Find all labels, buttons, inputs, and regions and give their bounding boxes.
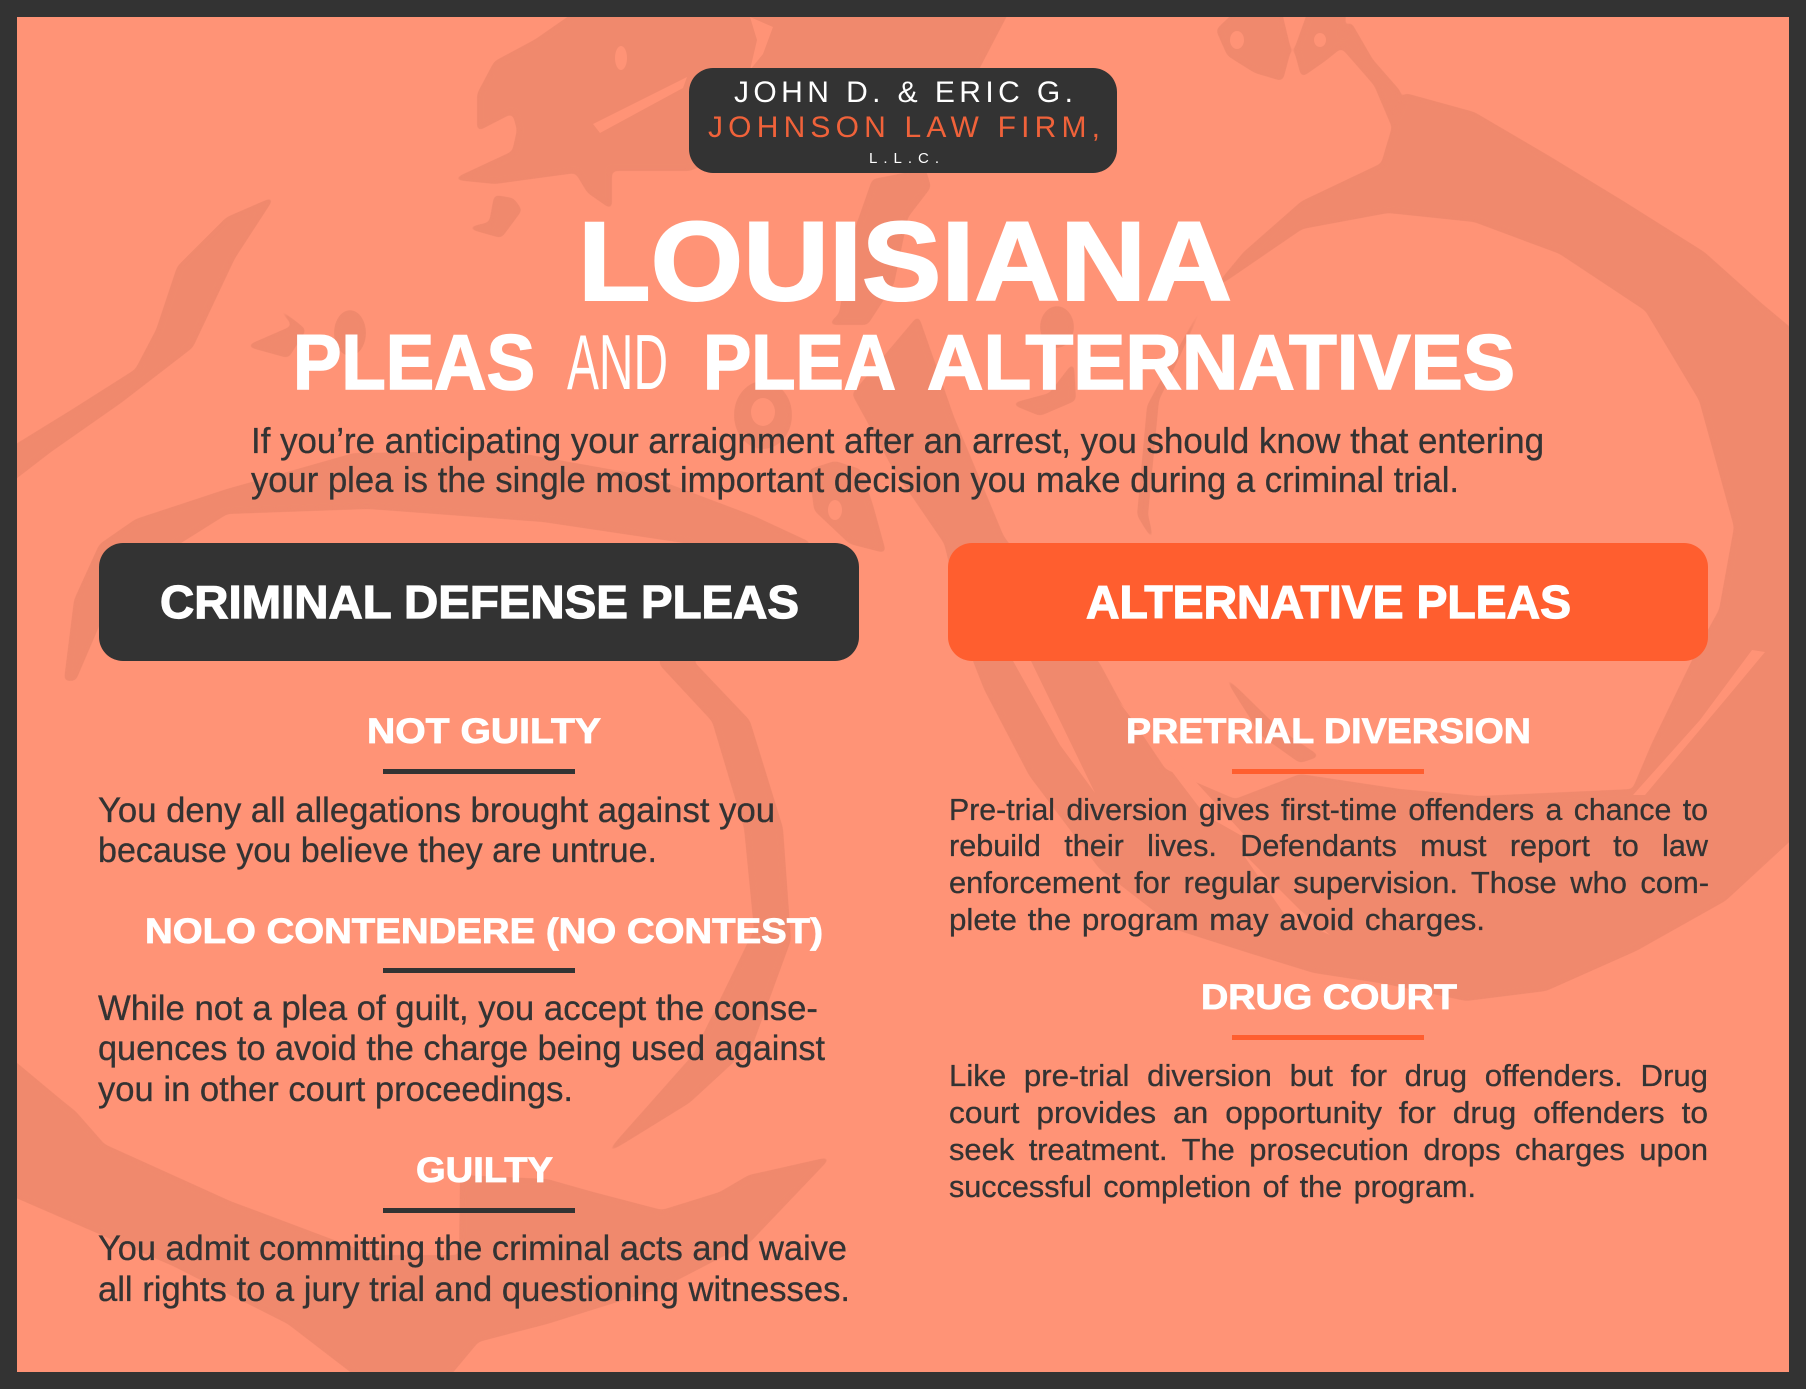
watermark highlights: lighter brush gaps [593,17,1765,935]
subtitle: AND [567,318,668,406]
section: drug court [949,978,1708,1204]
section: not guilty: NOT GUILTY [367,712,601,751]
section: drug court: successful completion of the program. [949,1169,1476,1204]
section: not guilty: You deny all allegations brought against you [98,791,775,830]
panel: alternative pleas header: ALTERNATIVE PLEAS [1086,576,1571,628]
section: pretrial diversion: enforcement for regular supervision. Those who com- [949,865,1709,900]
subtitle: ALTERNATIVES [927,318,1515,406]
panel: alternative pleas header [948,543,1708,661]
section: nolo contendere: NOLO CONTENDERE (NO CONTEST) [145,912,823,951]
section: guilty [98,1151,850,1309]
section: nolo contendere: you in other court proceedings. [98,1070,573,1109]
section: pretrial diversion: PRETRIAL DIVERSION [1126,712,1531,751]
panel: criminal defense pleas header [99,543,859,661]
section: not guilty [98,712,775,870]
intro text [251,420,1544,500]
section: pretrial diversion: rebuild their lives. Defendants must report to law [949,828,1709,863]
section: pretrial diversion: Pre-trial diversion gives first-time offenders a chance to [949,792,1708,827]
logo badge [689,68,1117,173]
section: guilty: all rights to a jury trial and questioning witnesses. [98,1270,850,1309]
section: nolo contendere [98,912,825,1109]
subtitle: PLEAS [293,318,535,406]
intro text: If you’re anticipating your arraignment after an arrest, you should know that entering [251,420,1544,461]
section: guilty: GUILTY [416,1151,553,1190]
intro text: your plea is the single most important decision you make during a criminal trial. [251,459,1459,500]
section: guilty: You admit committing the criminal acts and waive [98,1229,847,1268]
logo line 3: L.L.C. [869,150,939,167]
section: drug court: court provides an opportunity for drug offenders to [949,1095,1708,1130]
section: pretrial diversion [949,712,1709,937]
section: drug court: DRUG COURT [1201,978,1457,1017]
section: nolo contendere: While not a plea of guilt, you accept the conse- [98,989,818,1028]
section: nolo contendere: quences to avoid the charge being used against [98,1029,825,1068]
subtitle [293,318,1515,406]
title: LOUISIANA [578,199,1232,324]
section: drug court: Like pre-trial diversion but for drug offenders. Drug [949,1058,1708,1093]
logo line 2: JOHNSON LAW FIRM, [708,111,1100,144]
logo line 1: JOHN D. & ERIC G. [734,76,1073,109]
panel: criminal defense pleas header: CRIMINAL DEFENSE PLEAS [160,576,799,628]
section: pretrial diversion: plete the program may avoid charges. [949,902,1485,937]
subtitle: PLEA [703,318,896,406]
section: not guilty: because you believe they are untrue. [98,831,657,870]
section: drug court: seek treatment. The prosecution drops charges upon [949,1132,1708,1167]
